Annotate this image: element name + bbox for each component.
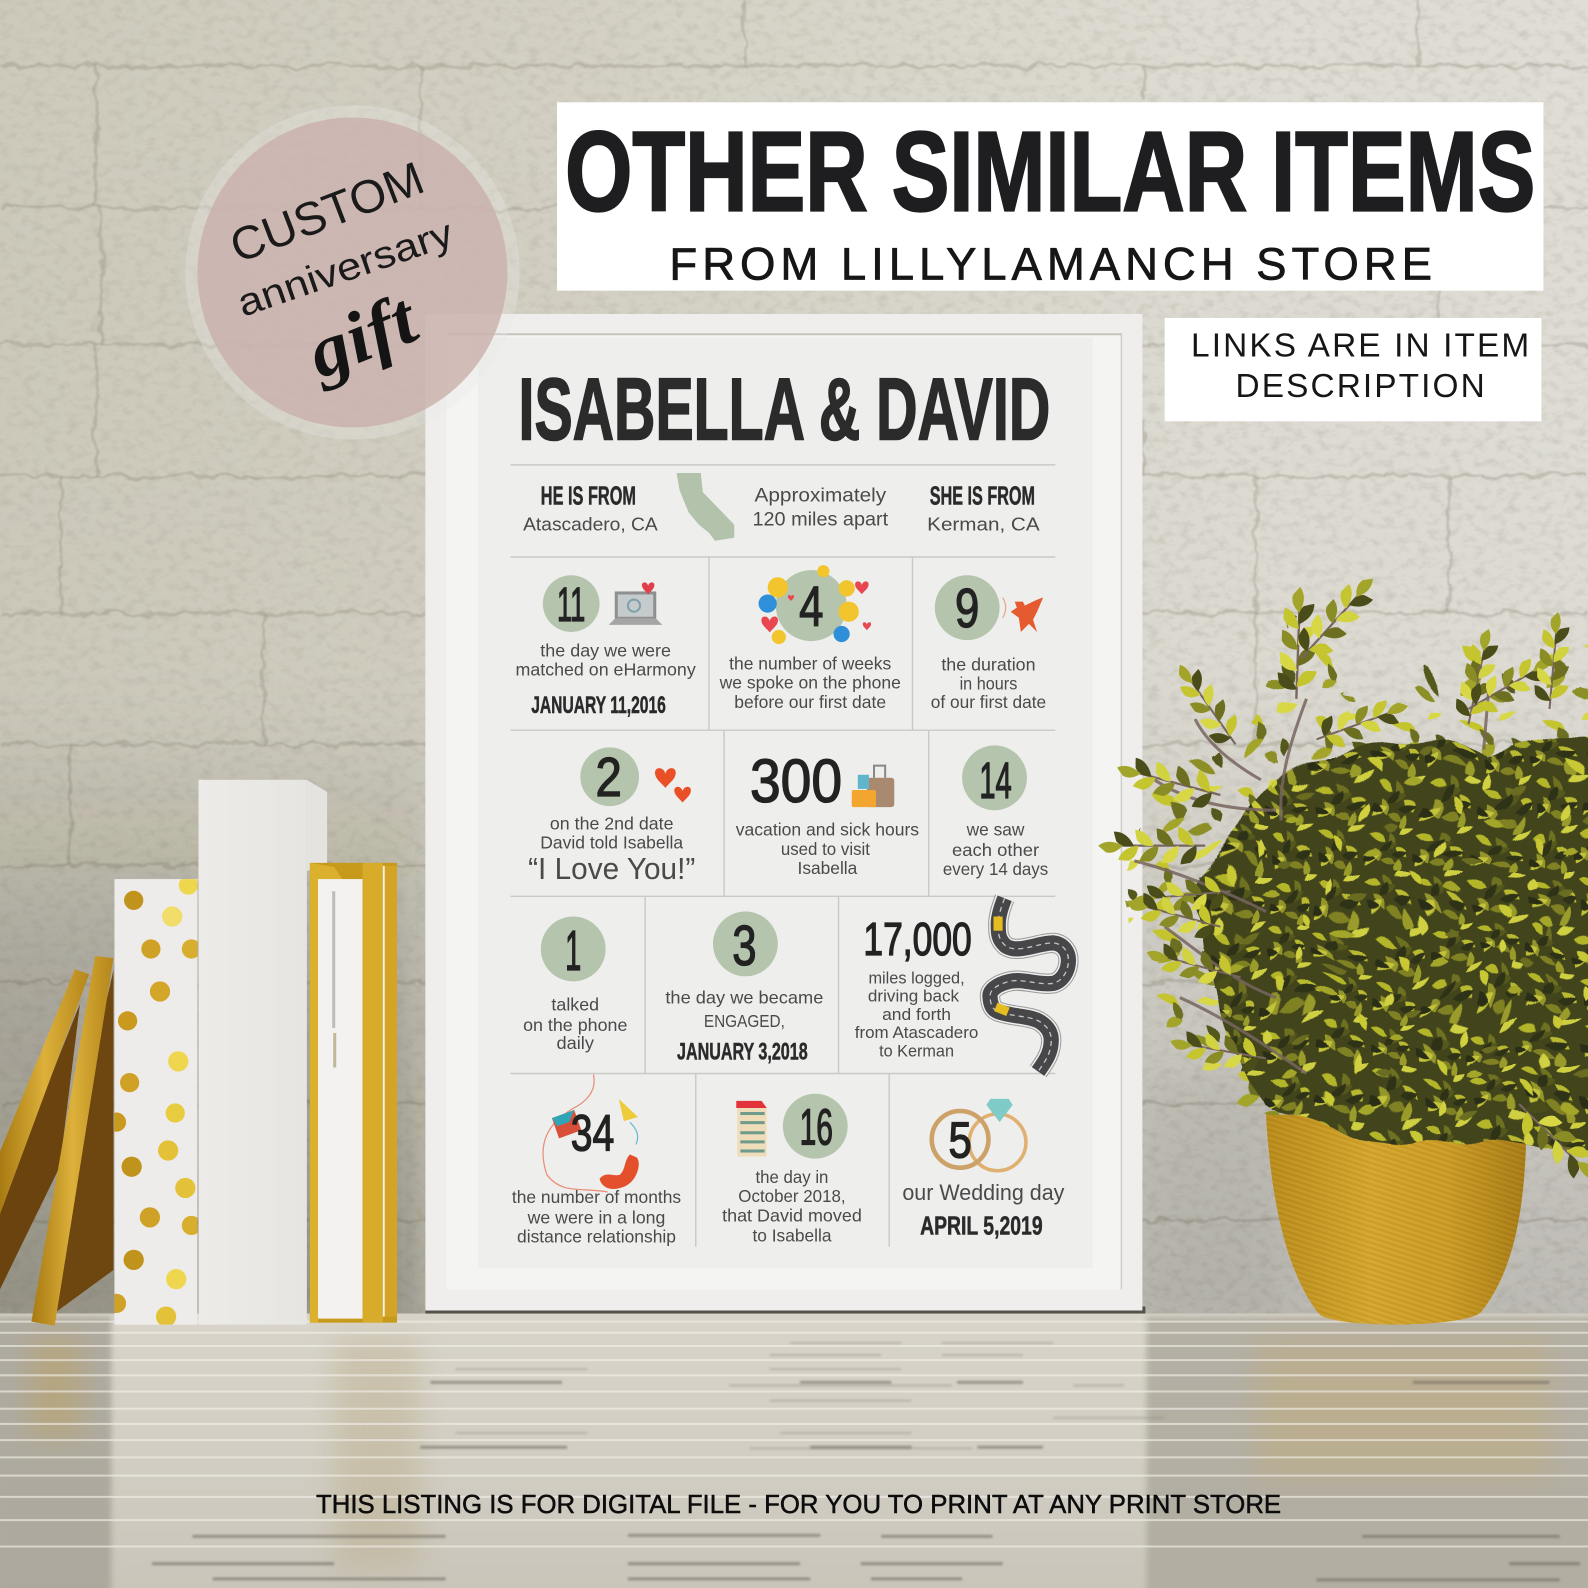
stat: 34: distance relationship (517, 1227, 676, 1247)
stat: 3: 3 (732, 915, 757, 978)
distance: 120 miles apart (752, 509, 889, 531)
stat: 4: we spoke on the phone (719, 673, 901, 693)
header banner (557, 102, 1543, 291)
stat: 11 (515, 575, 696, 719)
plant: highlight leaves (1200, 738, 1588, 1175)
books (0, 780, 397, 1327)
plant: sparse outer foliage (1119, 608, 1588, 1185)
stat: 17,000 (855, 898, 1068, 1071)
stat: 16 (722, 1094, 862, 1246)
stat: 3: ENGAGED, (704, 1011, 785, 1031)
note: links: DESCRIPTION (1236, 368, 1485, 405)
he is from: Atascadero, CA (523, 514, 658, 535)
plant (1098, 563, 1588, 1195)
badge: custom anniversary gift: CUSTOM (223, 152, 431, 273)
stat: 300: Isabella (798, 858, 858, 878)
gold pot (1266, 1114, 1526, 1325)
stat: 5: 5 (948, 1112, 972, 1169)
stat: 14: 14 (979, 752, 1012, 809)
stat: 34: we were in a long (527, 1207, 665, 1227)
badge: custom anniversary gift: anniversary (232, 211, 459, 326)
he is from: HE IS FROM (541, 480, 636, 510)
stat: 16: the day in (756, 1167, 828, 1187)
stat: 300: used to visit (781, 839, 870, 859)
stat: 5: APRIL 5,2019 (920, 1211, 1043, 1241)
badge: custom anniversary gift: gift (294, 276, 430, 394)
stat: 11: JANUARY 11,2016 (531, 692, 666, 719)
stat: 1: on the phone (523, 1015, 627, 1035)
stat: 3 (665, 911, 823, 1065)
stat: 4 (719, 565, 901, 712)
stat: 3: JANUARY 3,2018 (677, 1038, 808, 1065)
plant: dense core foliage (1200, 738, 1588, 1175)
stat: 2: 2 (595, 746, 622, 808)
stat: 2: David told Isabella (540, 833, 684, 853)
stat: 4: the number of weeks (729, 653, 891, 673)
stat: 1: daily (557, 1033, 594, 1053)
book: tall white box (198, 780, 327, 1325)
book: white with gold dots (114, 879, 198, 1325)
stat: 11: 11 (557, 578, 585, 632)
stat: 14: each other (952, 840, 1039, 860)
plant: branches (1134, 689, 1489, 1074)
stat: 5: our Wedding day (902, 1180, 1065, 1205)
stat: 17,000: driving back (868, 988, 960, 1006)
stat: 5 (902, 1099, 1065, 1241)
stat: 16: 16 (800, 1098, 833, 1155)
floor: wooden planks (0, 1314, 1588, 1588)
picture frame (425, 314, 1145, 1314)
poster panel (478, 337, 1093, 1268)
stat: 300: 300 (750, 747, 842, 815)
icon: emojis (759, 565, 871, 644)
stat: 2: “I Love You!” (528, 852, 695, 886)
note: links (1165, 318, 1541, 421)
stat: 11: the day we were (540, 640, 671, 660)
book: leaning gold 1 (0, 969, 89, 1289)
icon: California map (677, 473, 734, 541)
she is from: SHE IS FROM (930, 480, 1035, 510)
stat: 17,000: and forth (882, 1006, 951, 1024)
stat: 34 (512, 1075, 681, 1247)
stat: 16: to Isabella (752, 1226, 832, 1246)
stat: 9 (931, 575, 1046, 712)
footer note: THIS LISTING IS FOR DIGITAL FILE - FOR YOU TO PRINT AT ANY PRINT STORE (316, 1489, 1281, 1519)
stat: 300 (736, 747, 919, 878)
icon: wedding rings (932, 1099, 1026, 1171)
stat: 17,000: from Atascadero (855, 1024, 978, 1042)
she is from (927, 480, 1040, 535)
stat: 4: before our first date (734, 692, 886, 712)
plant: sprigs (1098, 563, 1588, 1195)
book: gold with white pages (310, 863, 397, 1323)
row 1: origins (523, 473, 1040, 541)
he is from (523, 480, 658, 535)
icon: hearts (655, 768, 691, 803)
stat: 300: vacation and sick hours (736, 820, 919, 840)
stat: 14: every 14 days (943, 859, 1048, 879)
note: links: LINKS ARE IN ITEM (1191, 327, 1529, 364)
stat: 34: 34 (571, 1104, 614, 1161)
icon: suitcases (852, 766, 894, 807)
stat: 1: 1 (565, 920, 581, 983)
stat: 1: talked (551, 995, 599, 1015)
icon: cupid (1003, 598, 1043, 632)
stat: 17,000: 17,000 (863, 913, 972, 965)
stat: 14 (943, 745, 1048, 879)
icon: phone cord, envelope, paper plane (543, 1075, 639, 1192)
stat: 16: that David moved (722, 1205, 862, 1225)
icon: winding road (990, 898, 1068, 1071)
stat: 1 (523, 917, 627, 1053)
she is from: Kerman, CA (927, 514, 1040, 535)
icon: laptop (609, 582, 662, 625)
badge: custom anniversary gift (185, 105, 520, 440)
stat: 16: October 2018, (738, 1186, 846, 1206)
stat: 3: the day we became (665, 988, 823, 1008)
stat: 14: we saw (966, 820, 1025, 840)
stat: 2: on the 2nd date (550, 813, 673, 833)
stat: 34: the number of months (512, 1187, 681, 1207)
stat: 9: 9 (955, 577, 979, 639)
stat: 9: of our first date (931, 692, 1046, 712)
stat: 9: the duration (941, 654, 1036, 674)
poster grid lines (510, 465, 1055, 1247)
stat: 11: matched on eHarmony (515, 660, 696, 680)
stat: 4: 4 (799, 576, 823, 639)
icon: apartment building (736, 1101, 767, 1157)
distance: Approximately (755, 484, 886, 506)
stat: 9: in hours (960, 674, 1017, 694)
book: leaning gold 2 (31, 956, 113, 1326)
stat: 17,000: to Kerman (879, 1042, 954, 1060)
poster title: ISABELLA & DAVID (519, 360, 1050, 459)
subheading: FROM LILLYLAMANCH STORE (669, 239, 1432, 290)
stat: 2 (528, 746, 695, 886)
distance (752, 484, 889, 531)
stat: 17,000: miles logged, (868, 969, 965, 987)
